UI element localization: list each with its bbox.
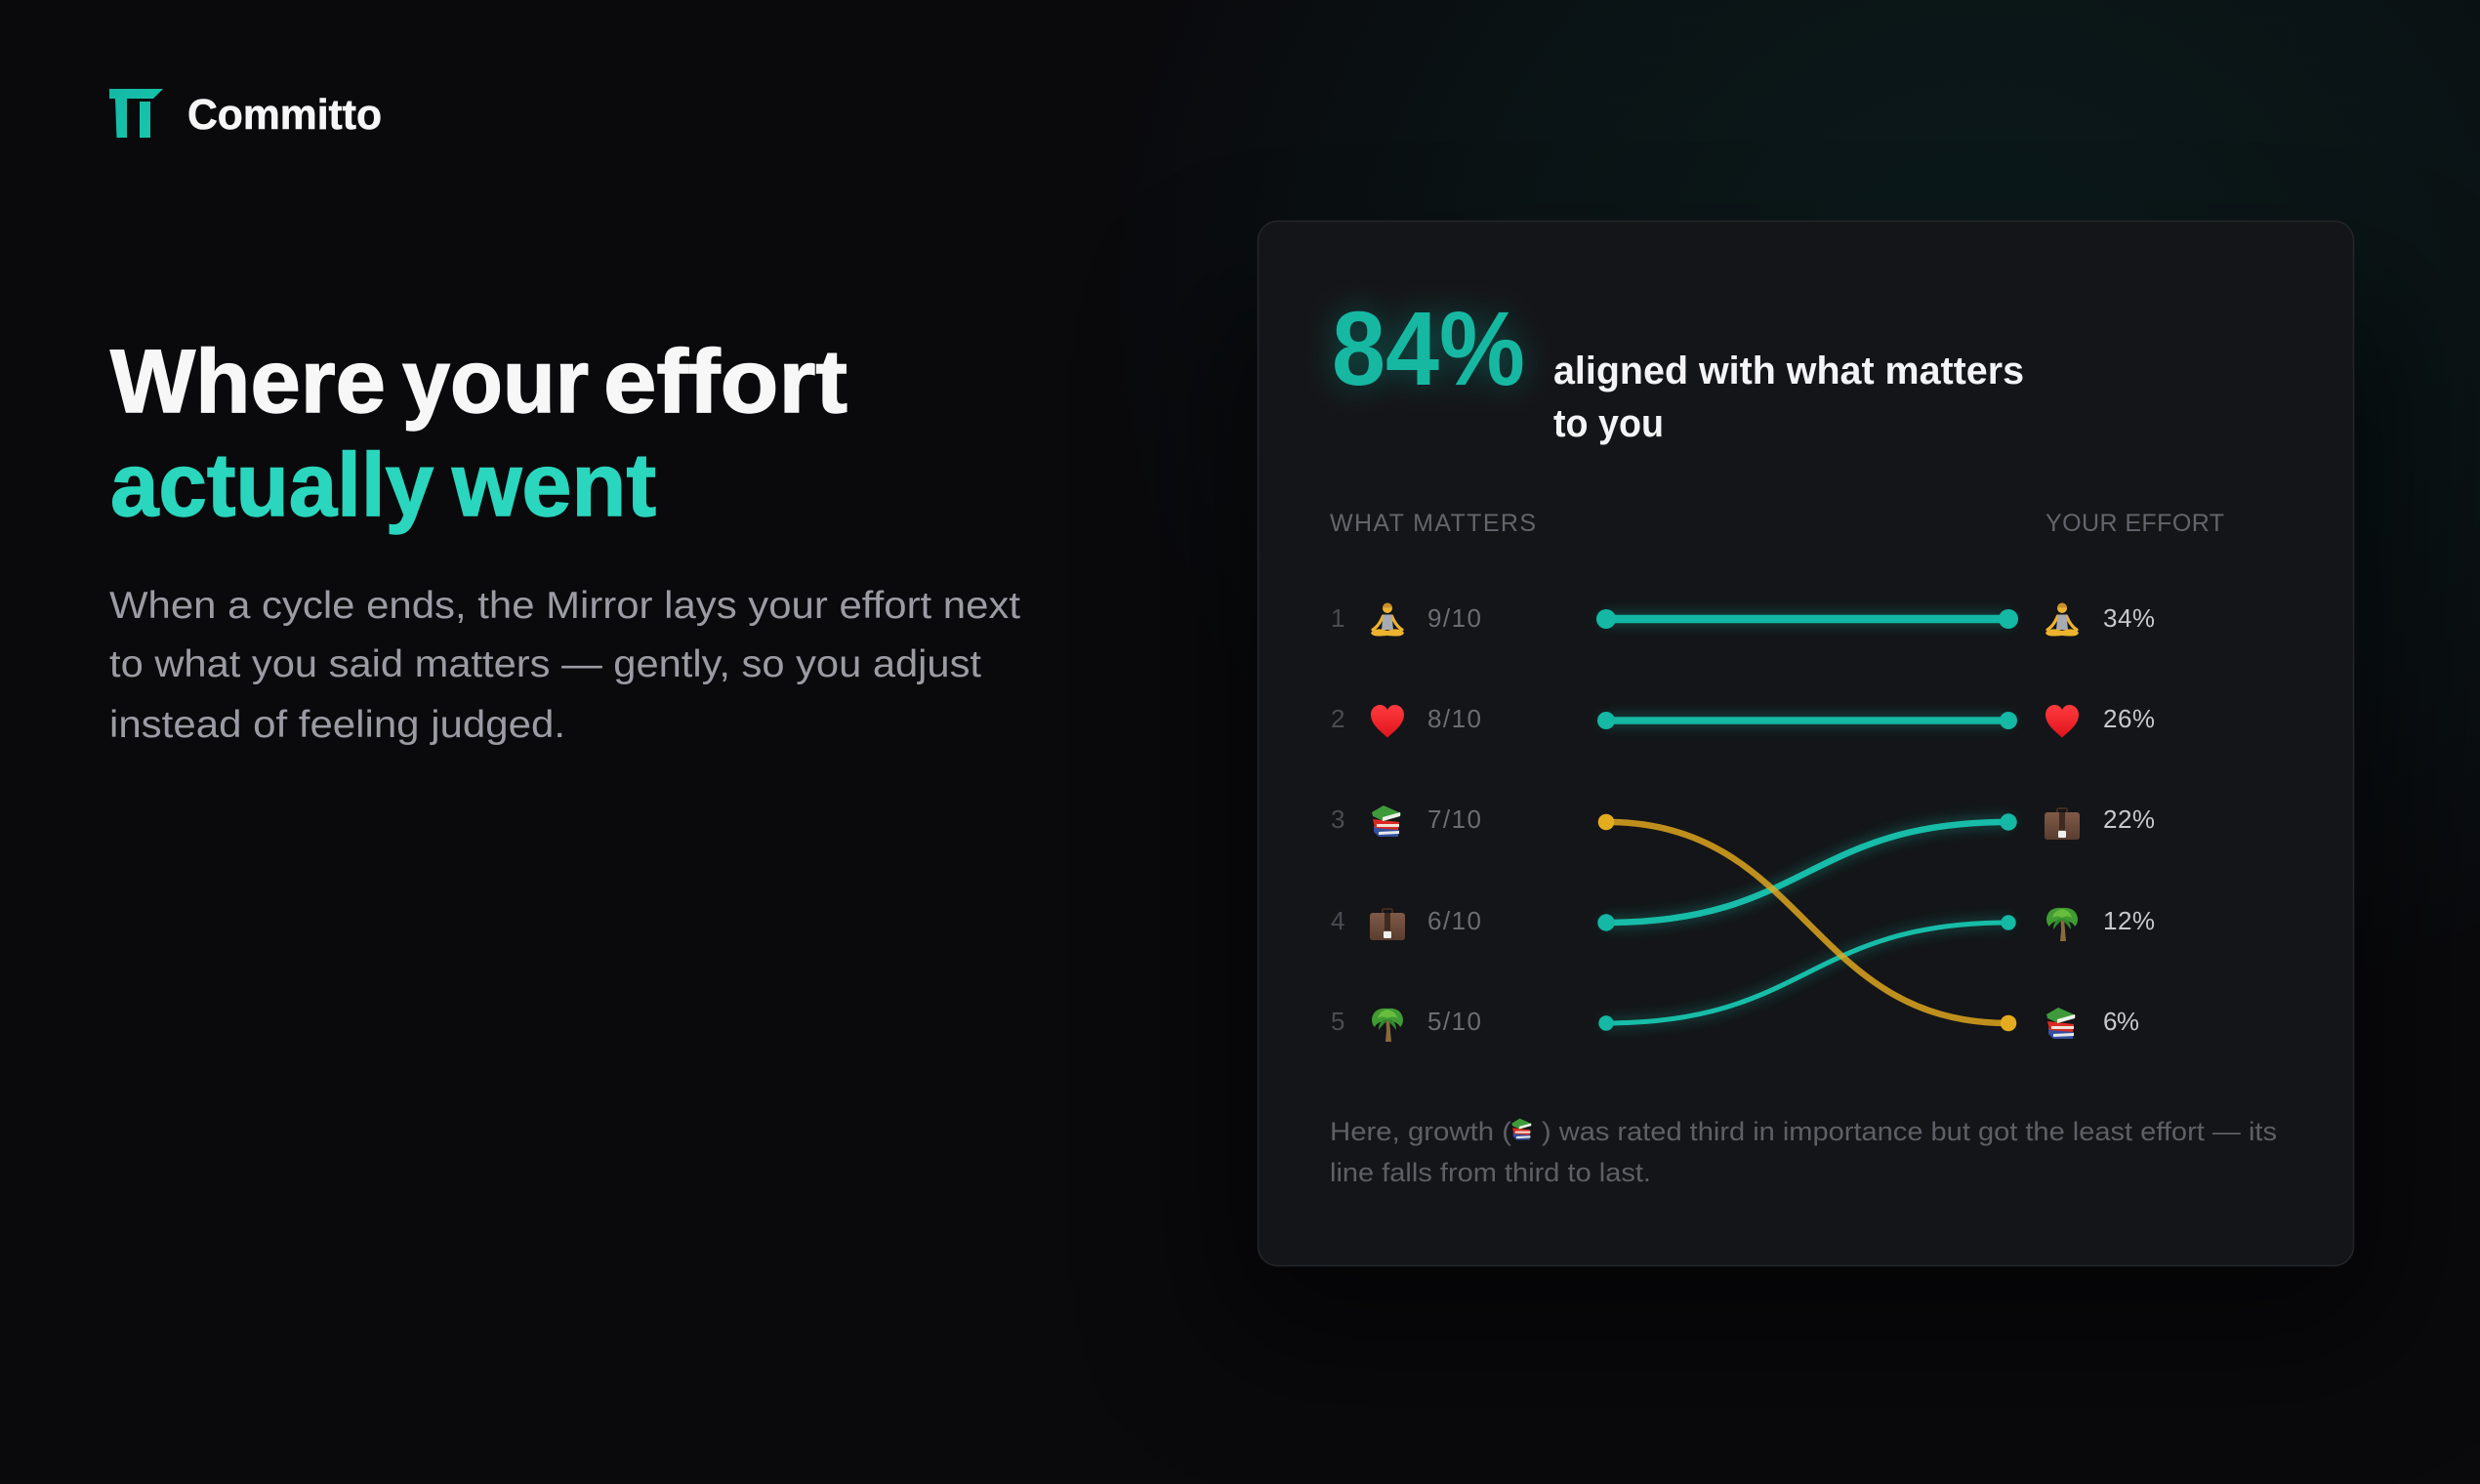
icon: briefcase — [2045, 807, 2080, 840]
icon: books — [2046, 1008, 2076, 1039]
footnote: ) was rated third in importance but got the least effort — its — [1542, 1117, 2277, 1146]
icon: person meditating — [2046, 603, 2079, 637]
footnote — [1330, 1117, 2277, 1187]
icon: heart — [1371, 705, 1404, 738]
row 4 left — [1331, 906, 1481, 940]
panel: alignment card — [1258, 221, 2353, 1265]
row 1 left — [1331, 603, 1481, 637]
icon: person meditating — [1371, 603, 1404, 637]
icon: books — [1372, 805, 1401, 837]
intro paragraph — [109, 585, 1020, 746]
left column: importance rows — [1331, 603, 1481, 1042]
row 1 left: 1 — [1331, 603, 1344, 633]
right column: effort rows — [2045, 603, 2155, 1039]
column heading: what matters: WHAT MATTERS — [1330, 510, 1536, 537]
row 5 left: 5 — [1331, 1007, 1344, 1036]
row 1 right — [2046, 603, 2155, 637]
row 3 right — [2045, 804, 2155, 840]
logo wordmark: Committo — [187, 91, 382, 139]
line: work rises — [1597, 813, 2017, 931]
title line 2: went — [451, 435, 656, 535]
stat caption — [1553, 350, 2024, 445]
row 2 right — [2046, 704, 2155, 738]
title line 1: effort — [603, 332, 847, 432]
title line 1: Where — [110, 332, 386, 432]
row 2 right: 26% — [2103, 704, 2155, 733]
icon: palm tree — [1372, 1009, 1403, 1042]
row 1 right: 34% — [2103, 603, 2155, 633]
title — [110, 332, 847, 535]
logo: Committo — [109, 89, 382, 139]
icon: logo mark — [109, 89, 163, 138]
line: relationships, rank held — [1597, 712, 2017, 729]
title line 1: your — [402, 332, 589, 432]
icon: briefcase — [1370, 908, 1405, 940]
intro paragraph: to what you said matters — gently, so you adjust — [109, 643, 981, 685]
line: inner peace, rank held — [1596, 609, 2018, 629]
row 4 right: 12% — [2103, 906, 2155, 935]
row 4 left: 4 — [1331, 906, 1344, 935]
line: leisure rises — [1598, 915, 2016, 1031]
row 2 left: 2 — [1331, 704, 1344, 733]
row 5 left: 5/10 — [1427, 1007, 1481, 1036]
column heading: your effort: YOUR EFFORT — [2046, 510, 2224, 537]
icon: palm tree — [2046, 908, 2078, 941]
row 1 left: 9/10 — [1427, 603, 1481, 633]
row 2 left — [1331, 704, 1481, 738]
row 4 left: 6/10 — [1427, 906, 1481, 935]
intro paragraph: instead of feeling judged. — [109, 704, 565, 746]
row 3 left: 3 — [1331, 804, 1344, 834]
footnote: Here, growth ( — [1330, 1117, 1511, 1146]
icon: books inline — [1511, 1119, 1532, 1139]
row 3 left — [1331, 804, 1481, 837]
row 5 right — [2046, 1007, 2139, 1039]
stat caption: to you — [1553, 402, 1664, 445]
footnote: line falls from third to last. — [1330, 1158, 1651, 1187]
row 4 right — [2046, 906, 2155, 941]
row 3 right: 22% — [2103, 804, 2155, 834]
row 5 right: 6% — [2103, 1007, 2139, 1036]
row 3 left: 7/10 — [1427, 804, 1481, 834]
slope chart: importance vs effort — [1596, 609, 2018, 1031]
stat caption: aligned with what matters — [1553, 350, 2024, 392]
line: growth falls — [1598, 814, 2016, 1031]
title line 2: actually — [110, 435, 434, 535]
row 2 left: 8/10 — [1427, 704, 1481, 733]
intro paragraph: When a cycle ends, the Mirror lays your effort next — [109, 585, 1020, 627]
row 5 left — [1331, 1007, 1481, 1042]
line glows — [1606, 619, 2008, 1023]
icon: heart — [2046, 705, 2079, 738]
stat: 84%: 84% — [1332, 289, 1525, 407]
